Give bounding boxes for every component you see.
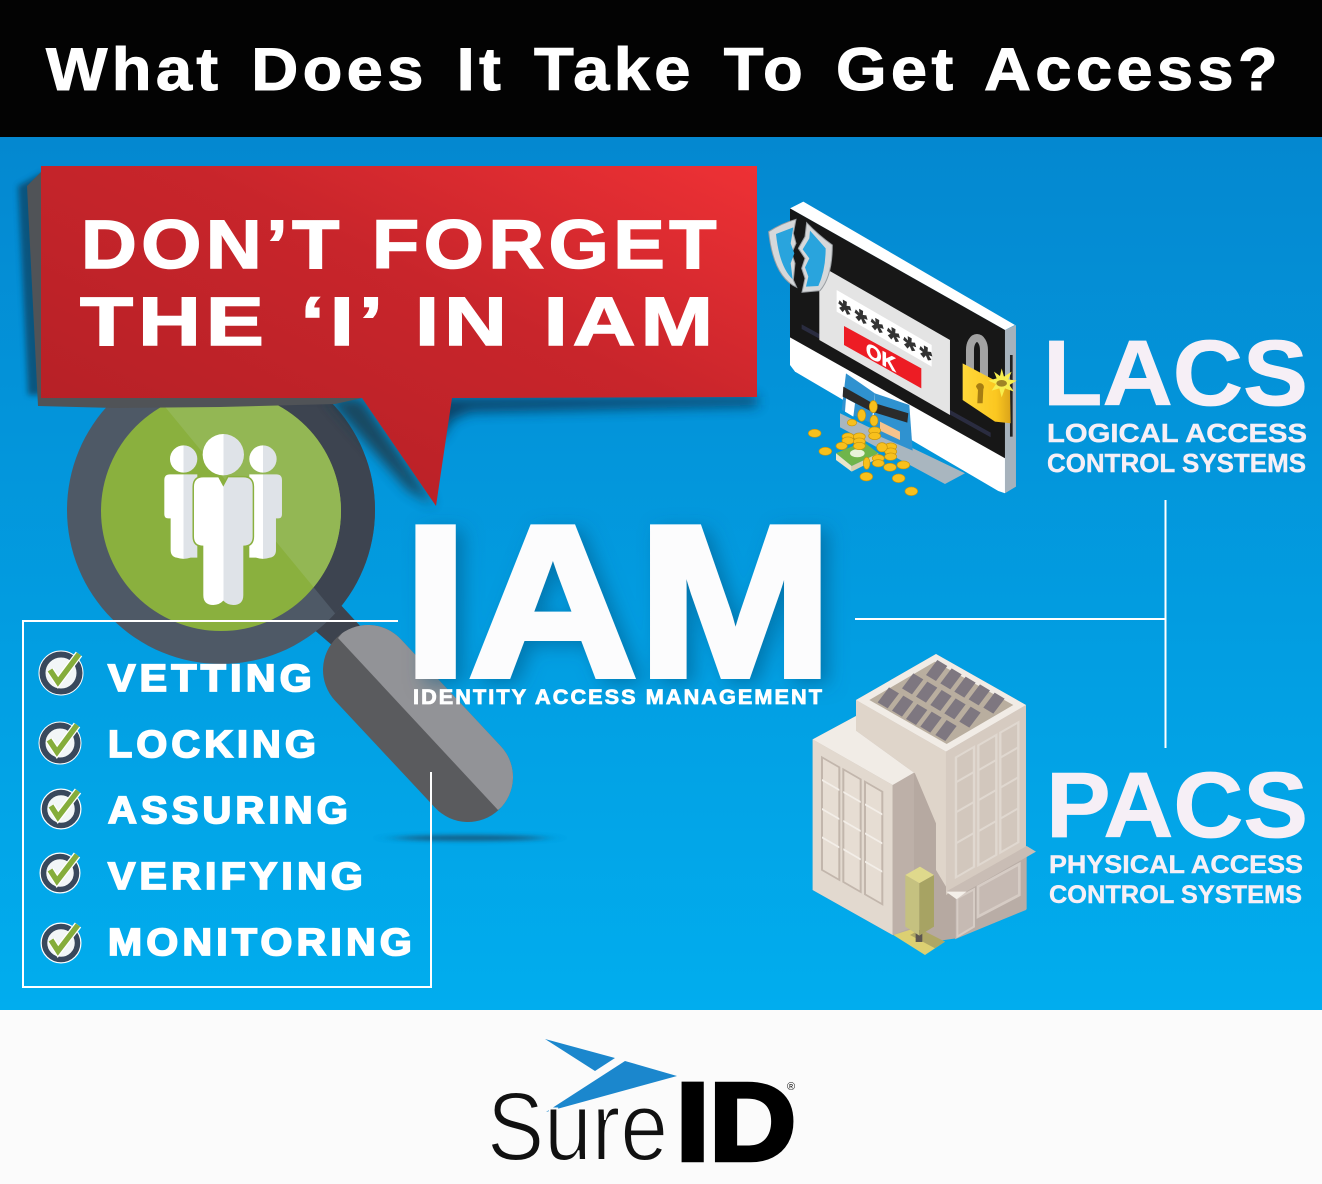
login dialog (819, 265, 950, 415)
LACS description: CONTROL SYSTEMS (1047, 448, 1306, 478)
SureID logo (487, 1039, 796, 1184)
checklist (39, 651, 416, 964)
PACS description: PHYSICAL ACCESS (1049, 851, 1303, 879)
icon: hacked computer: OK (866, 338, 896, 377)
roof (856, 654, 1026, 752)
icon: office building (813, 654, 1036, 955)
magnifier lens (101, 391, 341, 631)
padlock (970, 338, 984, 387)
coins (808, 401, 918, 496)
credit cards (842, 373, 875, 423)
title: What Does It Take To Get Access? (46, 36, 1282, 103)
handle grip (368, 670, 468, 777)
footer panel (0, 1010, 1322, 1184)
ground (893, 928, 945, 955)
SureID logo: ® (787, 1081, 795, 1093)
right windows (956, 722, 1018, 877)
LACS heading: LACS (1043, 321, 1308, 425)
bubble shadow (240, 396, 757, 440)
background panel (0, 137, 1322, 1010)
tree (916, 930, 922, 942)
ledge (946, 846, 1036, 899)
bubble heading: DON’T FORGET (81, 206, 721, 283)
SureID logo: ID (676, 1061, 796, 1184)
magnifier ring (67, 356, 375, 664)
icon: hacked computer (769, 202, 1017, 496)
LACS description (1047, 418, 1307, 478)
left windows (822, 757, 882, 904)
speech bubble: THE ‘I’ IN IAM (80, 283, 718, 360)
broken shield (769, 219, 797, 287)
item: assuring: ASSURING (108, 790, 352, 832)
icon: check (39, 722, 81, 764)
icon: check (39, 651, 83, 695)
PACS description: CONTROL SYSTEMS (1049, 881, 1302, 909)
IAM heading: IAM (403, 480, 833, 722)
handle shadow (395, 835, 545, 841)
item: locking: LOCKING (108, 724, 320, 766)
icon: group of people (164, 434, 282, 605)
OK button (844, 326, 921, 388)
icon: magnifying glass (67, 356, 545, 841)
building base (813, 654, 1026, 942)
item: vetting: VETTING (108, 658, 316, 700)
monitor side (1005, 325, 1016, 493)
main block right face (946, 705, 1026, 895)
wing front (813, 739, 893, 935)
IAM subtitle: IDENTITY ACCESS MANAGEMENT (413, 686, 824, 709)
item: verifying: VERIFYING (108, 856, 367, 898)
logo wordmark: Sure (487, 1072, 668, 1181)
wing side (893, 773, 914, 935)
password asterisks: ****** (839, 291, 933, 380)
screen (790, 208, 1005, 458)
cash (836, 442, 878, 466)
ground floor (955, 857, 1027, 939)
connector lines (855, 500, 1166, 748)
bubble body (41, 166, 757, 506)
LACS description: LOGICAL ACCESS (1047, 418, 1307, 448)
wing top (813, 716, 914, 785)
speech bubble (18, 166, 757, 506)
icon: check (40, 853, 80, 893)
PACS description (1049, 851, 1303, 909)
header bar (0, 0, 1322, 137)
main block left face (856, 700, 946, 887)
solar panels (878, 660, 1005, 741)
icon: check (41, 923, 81, 963)
checklist box (23, 621, 431, 987)
item: monitoring: MONITORING (108, 922, 416, 964)
handle neck (312, 602, 362, 652)
monitor top and front (790, 202, 1015, 330)
PACS heading: PACS (1046, 753, 1308, 857)
logo mark (545, 1039, 615, 1071)
handle highlight (368, 670, 468, 777)
icon: check (41, 789, 81, 829)
stand (840, 413, 965, 484)
